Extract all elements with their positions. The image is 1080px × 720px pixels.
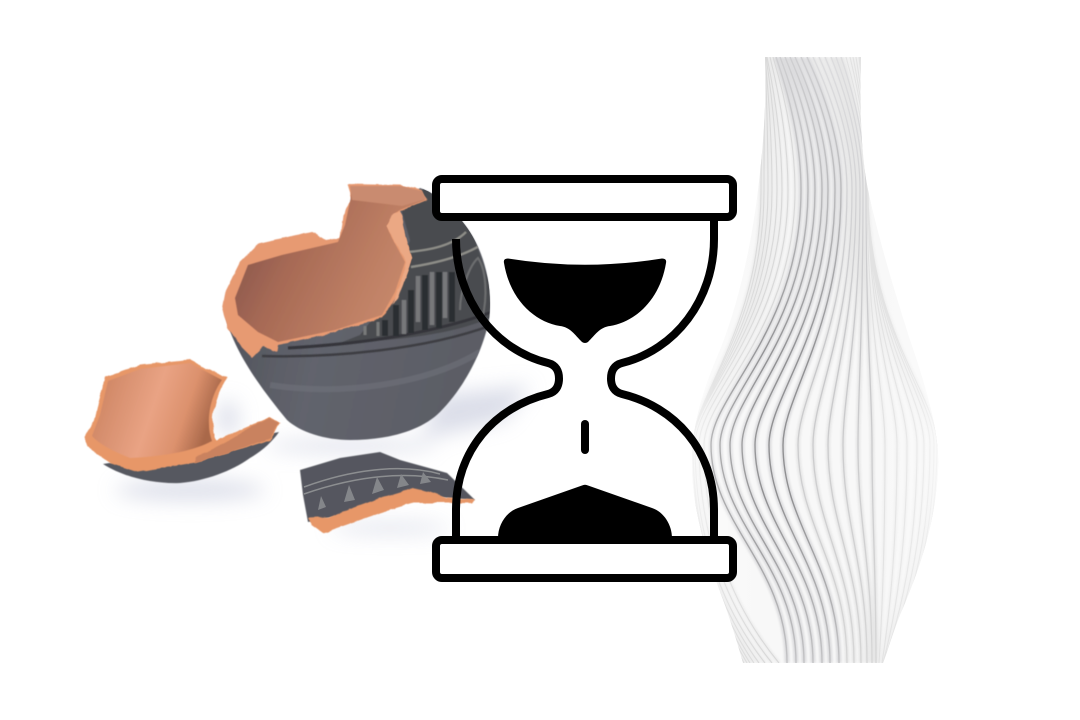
pot interior <box>235 188 425 342</box>
vase edge highlight fade <box>692 352 938 608</box>
hourglass upper sand <box>504 258 666 343</box>
main pot <box>222 184 495 440</box>
hourglass glass outline <box>456 217 714 540</box>
illustration: broken pot, hourglass and 3D-printed vase <box>84 57 938 663</box>
left shard <box>84 360 280 483</box>
icon: hourglass <box>436 179 733 578</box>
vase ribs <box>688 55 942 665</box>
photo: broken clay pot with shards <box>84 184 530 533</box>
pot broken rim <box>222 184 427 358</box>
left shard underside <box>103 432 279 483</box>
hourglass bottom cap <box>436 540 733 578</box>
vase silhouette <box>692 57 938 663</box>
front shard <box>300 452 475 533</box>
pot body <box>226 188 490 440</box>
pot front rim fragment <box>387 211 412 305</box>
left shard rim <box>84 360 280 472</box>
pot decoration <box>262 188 495 389</box>
left shard broken edge <box>195 418 279 463</box>
pot back rim band <box>350 186 426 206</box>
hourglass top cap <box>436 179 733 217</box>
front shard notches <box>318 472 431 510</box>
front shard incised lines <box>304 469 448 494</box>
front shard clay edge <box>308 488 475 533</box>
hourglass falling sand <box>581 420 589 454</box>
front shard dark outer surface <box>300 452 475 522</box>
photo: white ribbed 3D-printed vase <box>688 55 942 665</box>
cast shadows <box>115 385 530 533</box>
left shard inside <box>92 363 222 458</box>
hourglass lower sand <box>498 485 672 538</box>
